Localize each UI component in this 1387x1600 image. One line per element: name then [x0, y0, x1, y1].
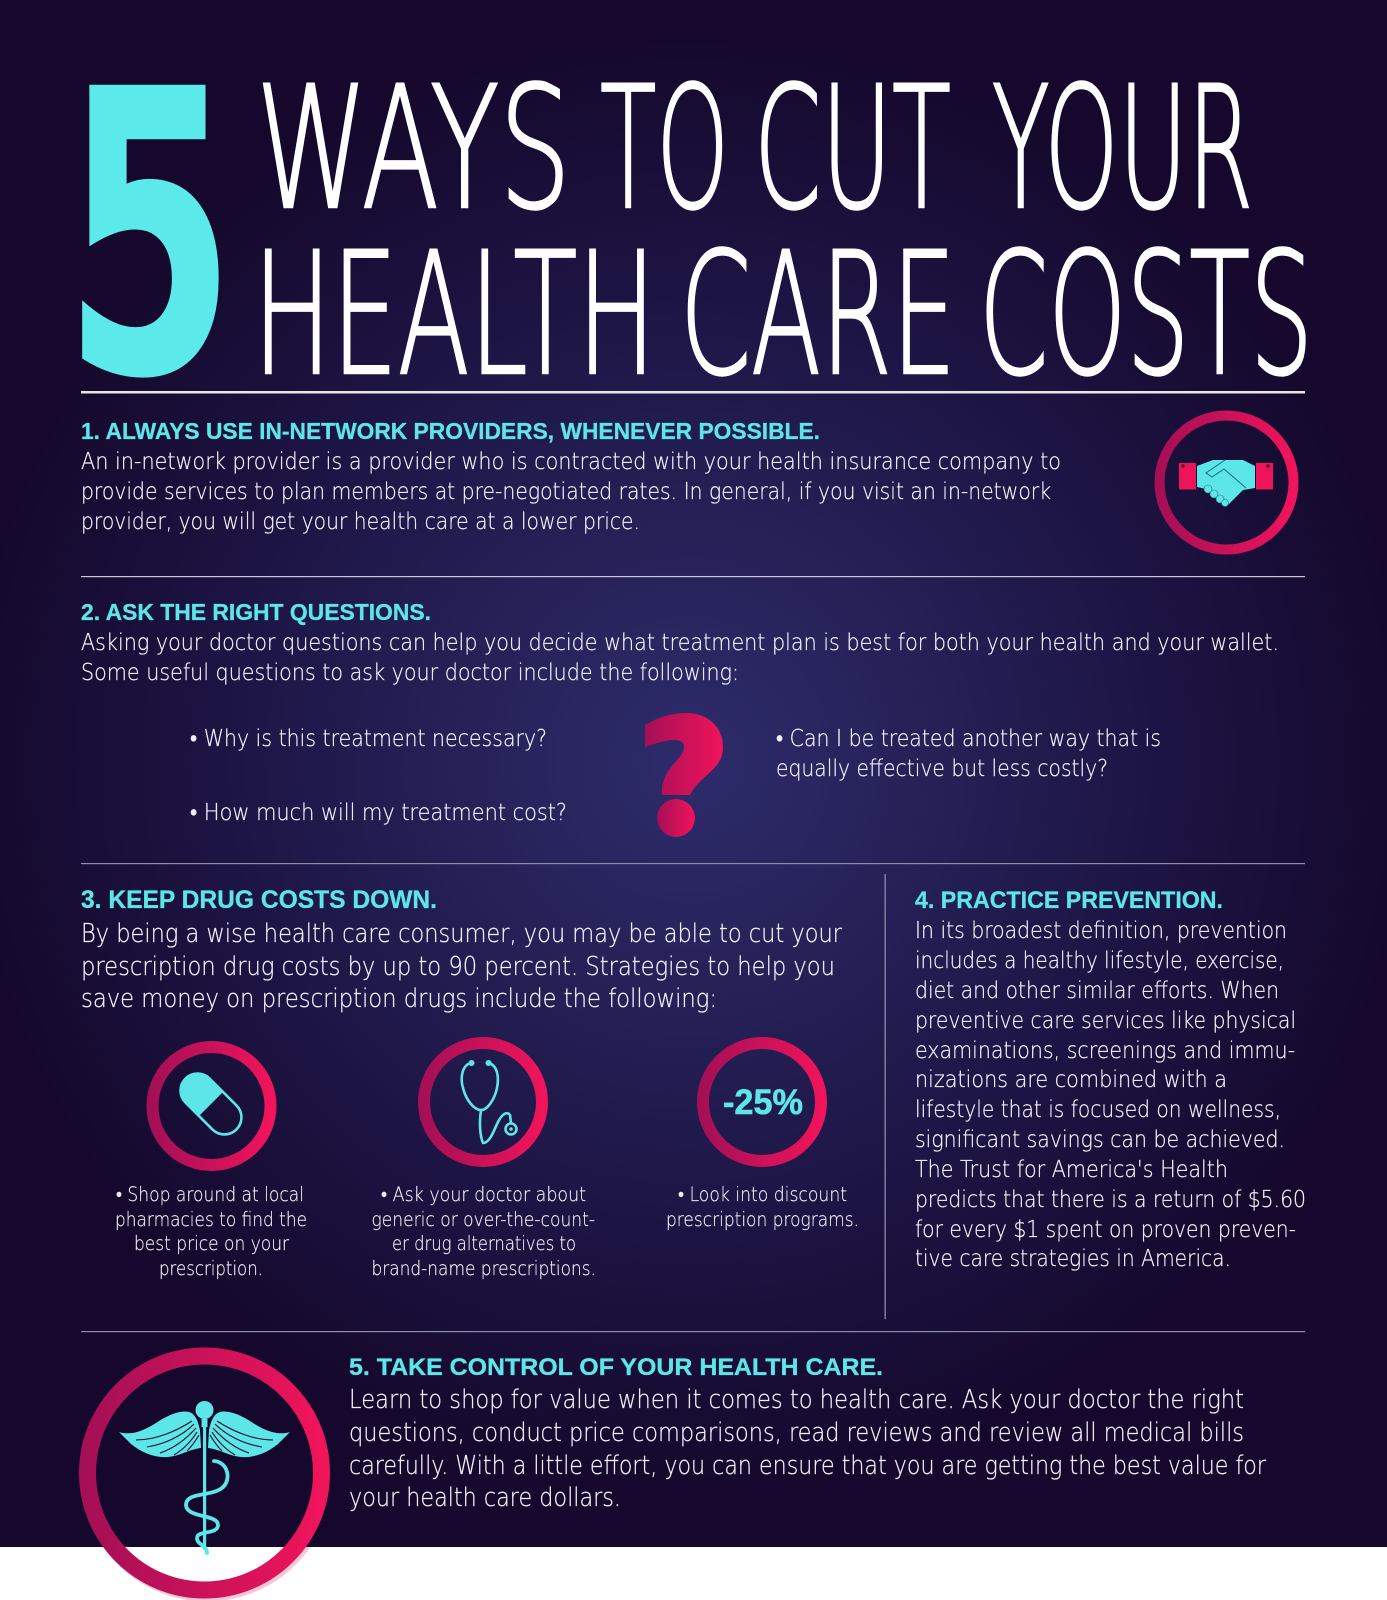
body 3: By being a wise health care consumer, you may be able to cut your	[81, 919, 842, 949]
body 5	[349, 1385, 1266, 1513]
body 4	[915, 916, 1306, 1272]
caption: generics	[372, 1183, 596, 1280]
caption: discount programs: • Look into discount	[678, 1183, 847, 1206]
section 3: drug costs	[81, 886, 859, 1280]
left questions: • How much will my treatment cost?	[190, 798, 567, 826]
heading 3: 3. KEEP DRUG COSTS DOWN.	[81, 886, 437, 914]
title: CUT	[754, 50, 951, 247]
body 4: examinations, screenings and immu-	[915, 1036, 1295, 1064]
title: HEALTH	[253, 216, 656, 413]
snake	[186, 1461, 228, 1553]
body 4: preventive care services like physical	[915, 1006, 1296, 1034]
body 5: Learn to shop for value when it comes to health care. Ask your doctor the right	[349, 1385, 1244, 1415]
title: TO	[600, 50, 729, 247]
body 2: Some useful questions to ask your doctor include the following:	[81, 658, 739, 686]
title	[253, 50, 1313, 413]
title: CARE	[680, 216, 956, 413]
icon: caduceus badge	[88, 1356, 324, 1593]
caption: generics: generic or over-the-count-	[372, 1208, 595, 1231]
body 3: save money on prescription drugs include the following:	[81, 984, 717, 1014]
caption: pharmacies: best price on your	[134, 1232, 289, 1255]
icon: pill	[152, 1047, 270, 1165]
body 4: nizations are combined with a	[915, 1065, 1227, 1093]
body 5: questions, conduct price comparisons, read reviews and review all medical bills	[349, 1418, 1244, 1448]
caption: discount programs: prescription programs.	[666, 1208, 859, 1231]
staff	[203, 1418, 206, 1550]
caption: pharmacies: pharmacies to find the	[115, 1208, 307, 1231]
left questions: • Why is this treatment necessary?	[190, 724, 547, 752]
body 4: predicts that there is a return of $5.60	[915, 1185, 1306, 1213]
section 2: ask the right questions	[81, 599, 1279, 826]
left wing	[119, 1412, 201, 1457]
body 5: your health care dollars.	[349, 1483, 621, 1513]
body 1	[81, 447, 1061, 535]
caption: discount programs	[666, 1183, 859, 1231]
caption: pharmacies	[115, 1183, 307, 1280]
heading 5: 5. TAKE CONTROL OF YOUR HEALTH CARE.	[349, 1354, 883, 1381]
title: WAYS	[256, 50, 571, 247]
body 3: prescription drug costs by up to 90 percent. Strategies to help you	[81, 952, 835, 982]
left questions	[190, 724, 567, 826]
body 4: The Trust for America's Health	[915, 1155, 1228, 1183]
body 4: for every $1 spent on proven preven-	[915, 1215, 1296, 1243]
caption: generics: er drug alternatives to	[392, 1232, 576, 1255]
section 4: practice prevention	[915, 887, 1306, 1272]
heading 2: 2. ASK THE RIGHT QUESTIONS.	[81, 599, 431, 625]
icon: minus 25 percent	[703, 1043, 821, 1161]
right question: • Can I be treated another way that is	[776, 724, 1161, 752]
body 1: provider, you will get your health care at a lower price.	[81, 507, 640, 535]
body 4: tive care strategies in America.	[915, 1244, 1231, 1272]
body 1: An in-network provider is a provider who is contracted with your health insurance company to	[81, 447, 1061, 475]
caption: pharmacies: • Shop around at local	[116, 1183, 304, 1206]
caption: generics: brand-name prescriptions.	[372, 1257, 596, 1280]
body 5: carefully. With a little effort, you can ensure that you are getting the best value for	[349, 1451, 1266, 1481]
body 4: lifestyle that is focused on wellness,	[915, 1095, 1281, 1123]
caption: generics: • Ask your doctor about	[381, 1183, 586, 1206]
right wing	[208, 1412, 290, 1457]
icon: stethoscope	[424, 1043, 542, 1161]
body 4: In its broadest definition, prevention	[915, 916, 1287, 944]
right question	[776, 724, 1161, 782]
icon: question mark	[645, 713, 723, 837]
body 4: includes a healthy lifestyle, exercise,	[915, 946, 1284, 974]
body 2	[81, 628, 1279, 686]
section 1: in-network providers	[81, 418, 1061, 535]
section 5: take control	[349, 1354, 1266, 1513]
body 3	[81, 919, 842, 1014]
body 4: significant savings can be achieved.	[915, 1125, 1285, 1153]
caption: pharmacies: prescription.	[159, 1257, 263, 1280]
body 1: provide services to plan members at pre-negotiated rates. In general, if you visit an in-network	[81, 477, 1051, 505]
big numeral 5: 5	[63, 6, 236, 465]
heading 4: 4. PRACTICE PREVENTION.	[915, 887, 1223, 914]
right question: equally effective but less costly?	[776, 754, 1108, 782]
heading 1: 1. ALWAYS USE IN-NETWORK PROVIDERS, WHENEVER POSSIBLE.	[81, 418, 820, 444]
body 4: diet and other similar efforts. When	[915, 976, 1279, 1004]
icon: handshake	[1160, 416, 1294, 550]
icon: minus 25 percent: -25%	[723, 1083, 803, 1122]
